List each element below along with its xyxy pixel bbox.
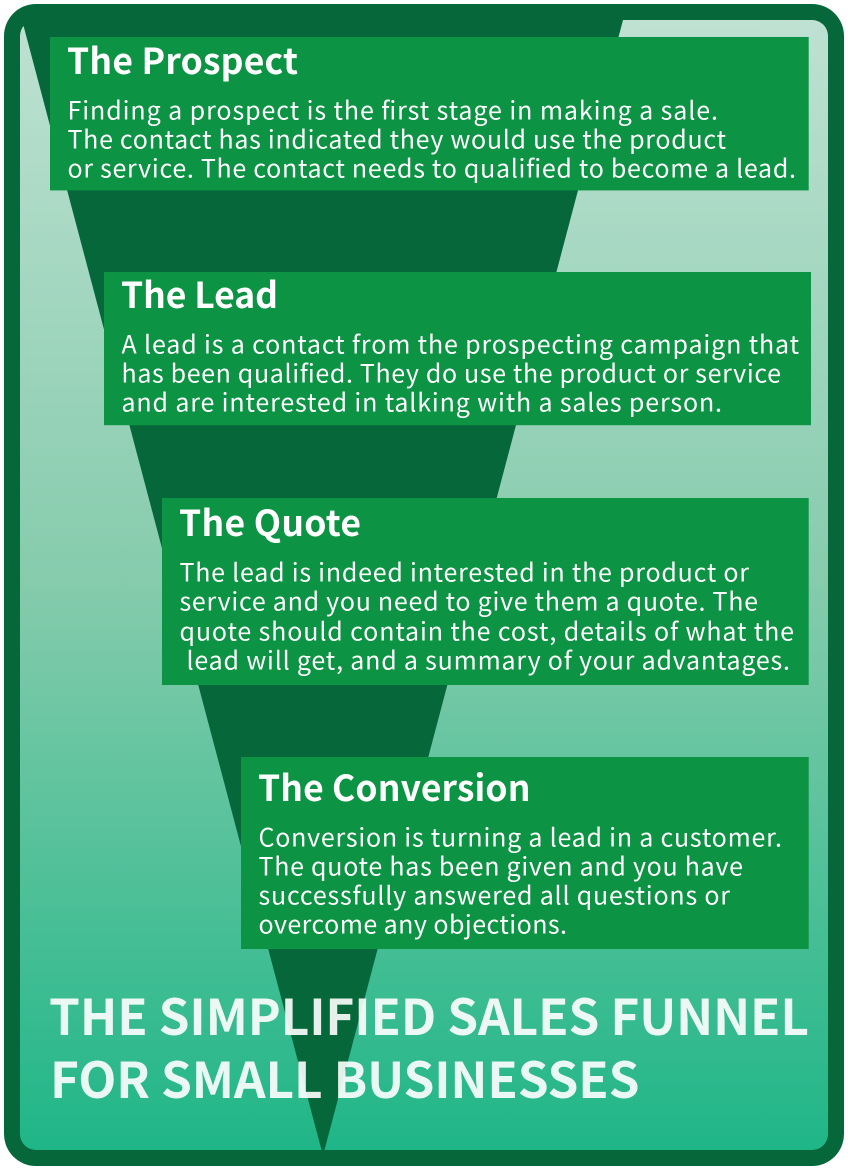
title: FOR SMALL BUSINESSES <box>50 1042 640 1113</box>
heading: the prospect: The Prospect <box>67 34 298 85</box>
text: the conversion description: overcome any objections. <box>258 906 567 942</box>
title <box>49 979 809 1113</box>
panel: the quote <box>162 496 809 685</box>
panel: the prospect <box>50 34 809 190</box>
text: the conversion description <box>258 818 782 942</box>
heading: the quote: The Quote <box>179 496 361 547</box>
panel: the lead <box>104 268 811 425</box>
text: the prospect description <box>68 92 796 186</box>
text: the quote description: The lead is indeed interested in the product or <box>180 554 749 590</box>
heading: the lead: The Lead <box>121 268 278 319</box>
text: the quote description: service and you need to give them a quote. The <box>180 582 758 618</box>
title: THE SIMPLIFIED SALES FUNNEL <box>49 979 809 1050</box>
text: the quote description: lead will get, and a summary of your advantages. <box>186 642 790 678</box>
text: the lead description: A lead is a contact from the prospecting campaign that <box>122 326 800 362</box>
text: the lead description <box>122 326 800 420</box>
funnel <box>22 20 623 1150</box>
panel: the conversion <box>241 757 809 949</box>
text: the quote description: quote should contain the cost, details of what the <box>180 612 794 648</box>
text: the prospect description: Finding a prospect is the first stage in making a sale. <box>68 92 718 128</box>
text: the lead description: and are interested in talking with a sales person. <box>122 384 722 420</box>
heading: the conversion: The Conversion <box>258 761 530 812</box>
text: the conversion description: The quote has been given and you have <box>258 848 743 884</box>
text: the conversion description: Conversion is turning a lead in a customer. <box>258 818 782 854</box>
text: the prospect description: or service. The contact needs to qualified to become a lead. <box>68 150 796 186</box>
text: the conversion description: successfully answered all questions or <box>258 876 730 912</box>
text: the quote description <box>180 554 794 678</box>
text: the prospect description: The contact has indicated they would use the product <box>68 120 727 156</box>
text: the lead description: has been qualified. They do use the product or service <box>122 354 781 390</box>
